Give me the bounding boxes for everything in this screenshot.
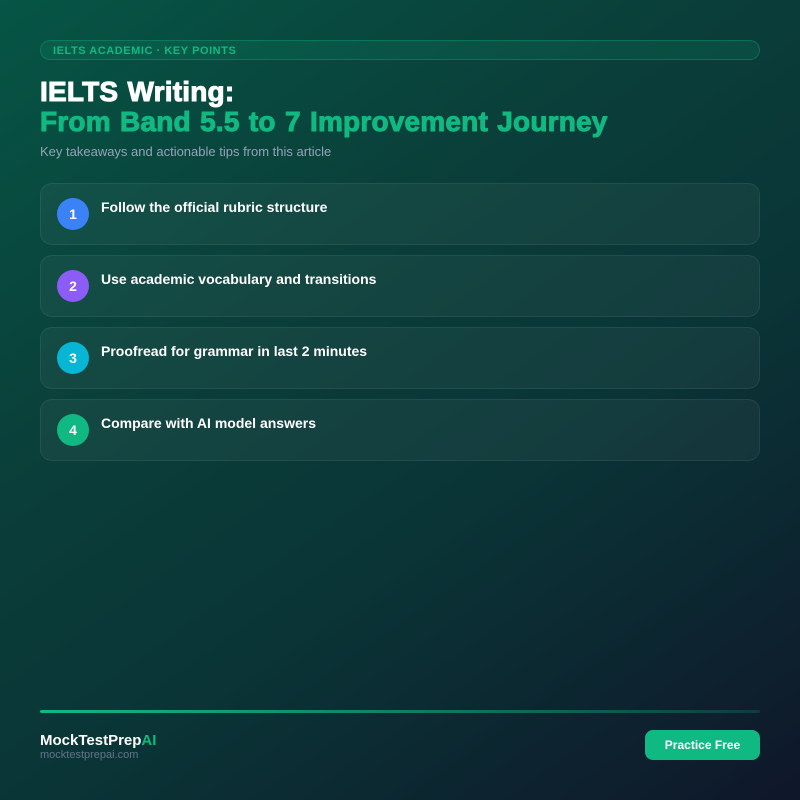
panel: key point 4 [40, 399, 760, 461]
website url: mocktestprepai.com [40, 749, 138, 761]
category badge [40, 40, 760, 60]
key point 1 text: Follow the official rubric structure [101, 199, 327, 215]
icon: number 2 [57, 270, 89, 302]
panel: key point 2 [40, 255, 760, 317]
icon: number 1 [57, 198, 89, 230]
icon: number 4: 4 [69, 422, 77, 438]
footer accent bar [40, 710, 760, 713]
icon: number 3: 3 [69, 350, 77, 366]
icon: number 3 [57, 342, 89, 374]
title [40, 76, 608, 138]
panel: key point 3 [40, 327, 760, 389]
key point 2 text: Use academic vocabulary and transitions [101, 271, 376, 287]
category badge: IELTS ACADEMIC · KEY POINTS [53, 45, 236, 57]
call to action button [645, 730, 760, 760]
call to action button: Practice Free [665, 738, 740, 752]
key point 3 text: Proofread for grammar in last 2 minutes [101, 343, 367, 359]
brand name: MockTestPrepAI [40, 732, 156, 749]
icon: number 4 [57, 414, 89, 446]
title: IELTS Writing: [40, 76, 234, 107]
icon: number 1: 1 [69, 206, 77, 222]
panel: key point 1 [40, 183, 760, 245]
key point 4 text: Compare with AI model answers [101, 415, 316, 431]
icon: number 2: 2 [69, 278, 77, 294]
title: From Band 5.5 to 7 Improvement Journey [40, 106, 608, 137]
subtitle: Key takeaways and actionable tips from this article [40, 144, 331, 159]
